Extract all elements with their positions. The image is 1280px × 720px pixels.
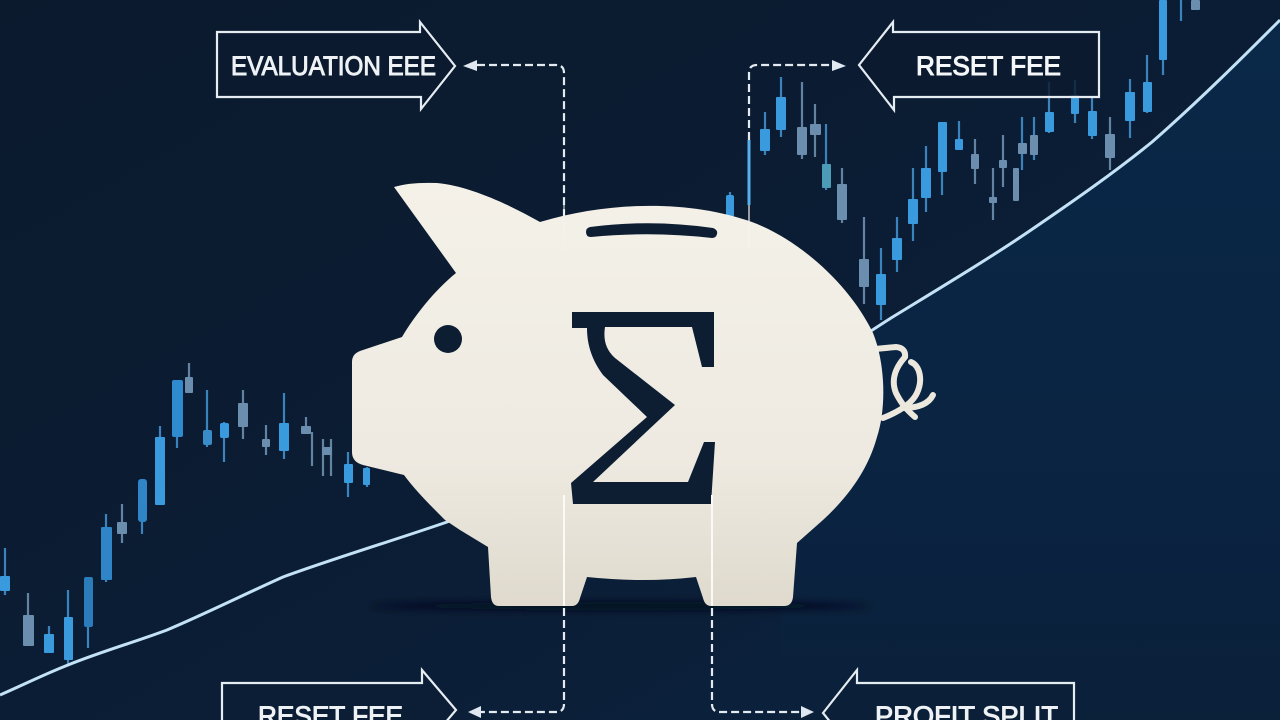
coin slot [586, 223, 717, 238]
piggy bank [352, 183, 933, 606]
connector: upper right solid segment [748, 140, 750, 205]
connector: lower reset fee [468, 495, 564, 718]
pig body [352, 183, 883, 606]
pig tail [875, 347, 933, 418]
connector: upper reset fee [749, 60, 846, 248]
connector: evaluation fee [463, 60, 564, 250]
pig eye [434, 325, 462, 353]
pig shadow [370, 602, 870, 610]
label: evaluation fee: EVALUATION EEE [231, 51, 436, 81]
connector: profit split [712, 495, 814, 718]
label: profit split [823, 670, 1074, 720]
area under trend line [780, 20, 1280, 720]
label: reset fee top [859, 22, 1099, 110]
label: evaluation fee [217, 22, 455, 109]
label: reset fee bottom [222, 670, 456, 720]
label: reset fee top: RESET FEE [916, 51, 1061, 81]
candlestick chart: lower left [0, 363, 370, 665]
candlestick chart: upper right [726, 0, 1200, 320]
sigma symbol [571, 312, 715, 504]
